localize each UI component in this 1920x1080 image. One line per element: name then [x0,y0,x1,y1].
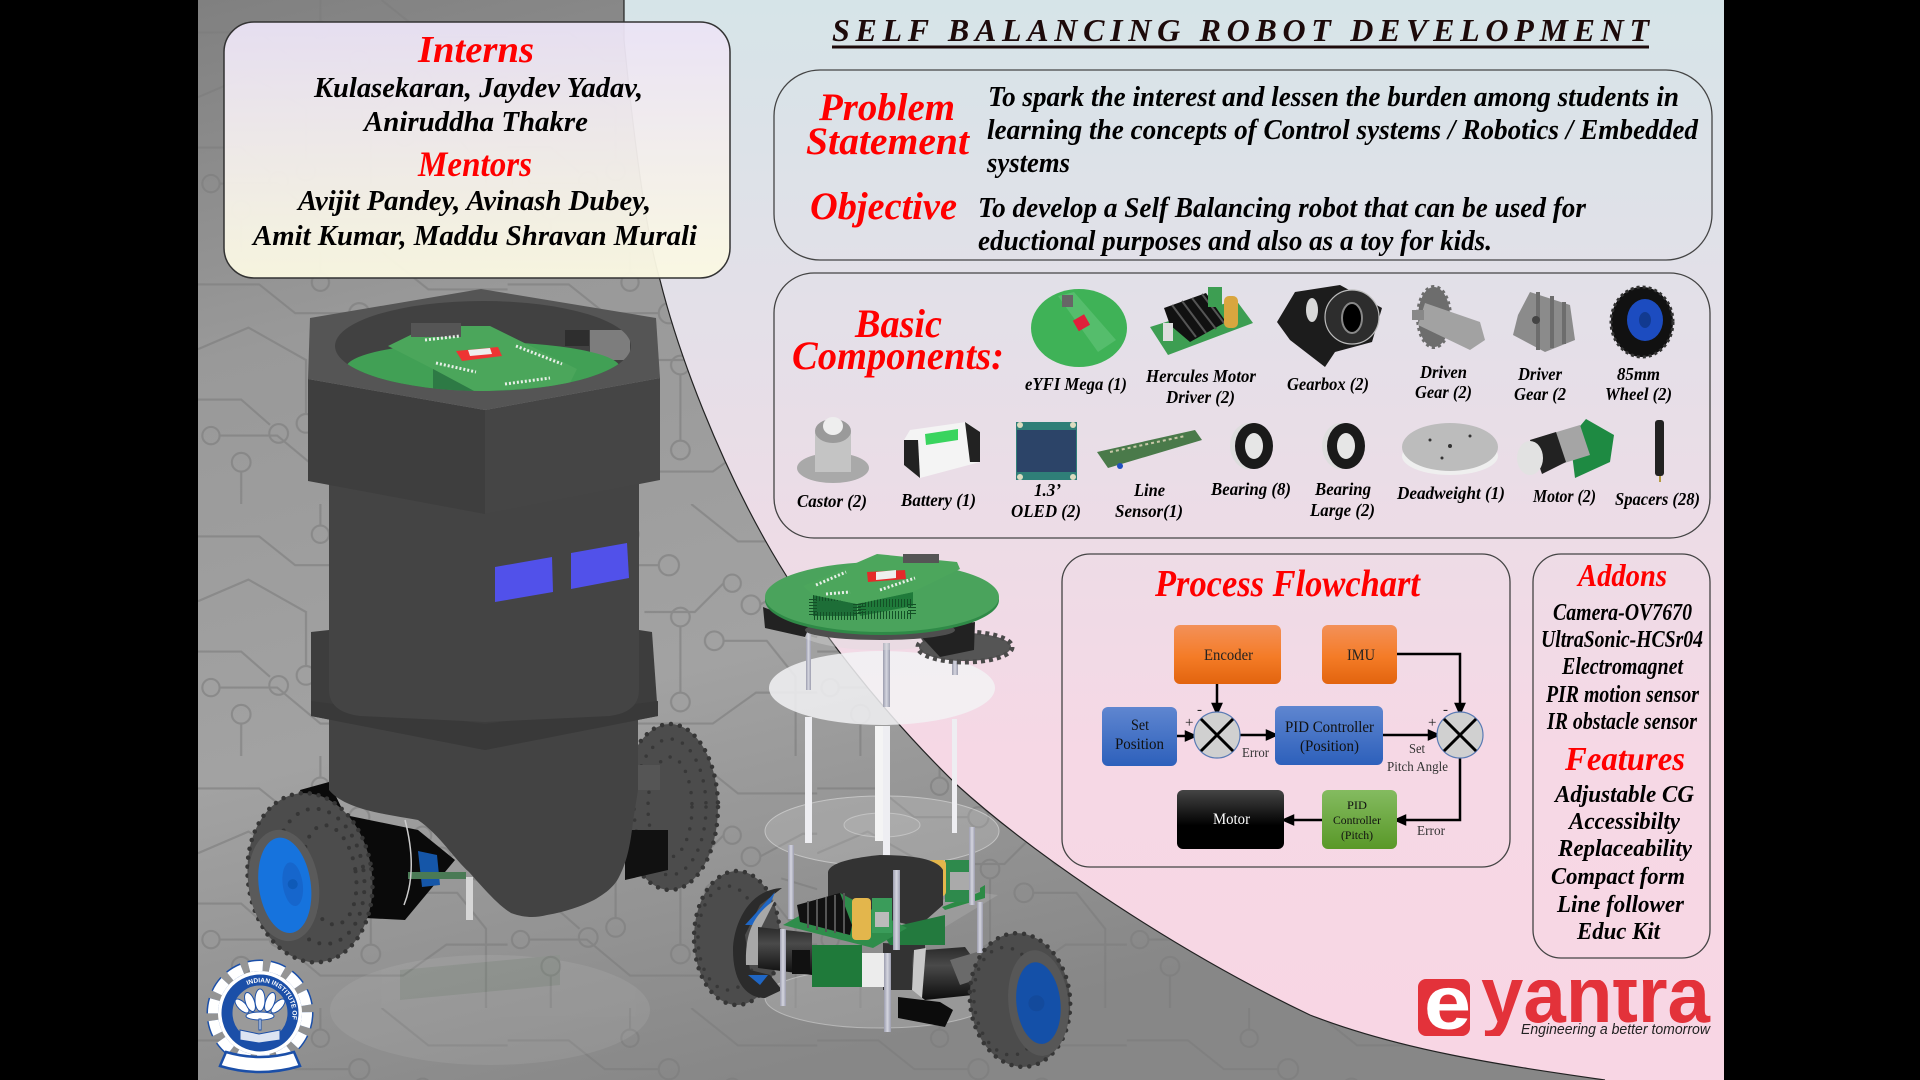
component: castor: Castor (2) [797,491,867,512]
right wheel [963,928,1077,1072]
heading: interns: Interns [417,29,534,71]
block: encoder: Encoder [1204,647,1254,664]
block: IMU: IMU [1347,647,1375,664]
block: PID controller position [1275,706,1383,765]
component: OLED: OLED (2) [1011,501,1081,522]
block: encoder [1174,625,1281,684]
upper steel rods [806,630,958,707]
objective text: eductional purposes and also as a toy for kids. [978,226,1492,257]
heading: addons: Addons [1576,557,1667,593]
heading: problem statement: Statement [806,120,970,163]
logo e badge: e [1424,961,1471,1046]
flow labels: Error [1242,746,1269,761]
component: bearing [1210,423,1291,500]
addons list: IR obstacle sensor [1546,709,1698,735]
black axle assembly [300,782,473,920]
flow labels: Pitch Angle [1387,760,1448,775]
objective text [978,193,1587,257]
heading: objective: Objective [810,185,957,228]
rear motor driver [928,860,985,910]
block: PID controller position: PID Controller [1285,719,1375,736]
component: bearing large [1309,423,1375,521]
motto ribbon [220,1052,300,1072]
illustration: exploded robot [694,554,1077,1072]
lotus emblem [233,989,287,1043]
logo wordmark: yantra [1481,950,1710,1039]
component: gearbox [1277,285,1382,395]
block: set position [1102,707,1177,766]
green bracket and white block [812,915,945,987]
component: motor [1517,419,1614,507]
pastel curved right panel [624,0,1724,1080]
component: eYFI Mega [1025,289,1127,395]
component: spacers [1615,420,1700,510]
block: PID controller pitch: Controller [1333,813,1381,827]
flow labels [1185,702,1448,839]
panel: interns and mentors [224,22,730,278]
summing junction left [1194,712,1240,758]
rear axle [625,765,668,880]
component: deadweight [1396,423,1505,504]
lower collar [311,630,658,750]
logo tagline: Engineering a better tomorrow [1521,1021,1711,1038]
logo: IIT Bombay [206,960,314,1074]
block: motor: Motor [1213,811,1251,828]
component: 85mm wheel: 85mm [1617,364,1660,384]
blue display left [495,557,553,602]
features list: Accessibilty [1567,809,1680,835]
frosted white disc [769,651,995,725]
flow labels: Set [1409,742,1425,757]
block: PID controller pitch: (Pitch) [1341,828,1373,842]
features list: Adjustable CG [1553,782,1695,808]
component: bearing large: Large (2) [1309,500,1375,521]
gear and gearbox under top disc [763,606,1012,662]
lower transparent discs [765,796,999,1028]
component: driven gear: Gear (2) [1415,382,1472,403]
component: battery [900,422,980,511]
intern names: Kulasekaran, Jaydev Yadav, [313,72,643,104]
block: set position: Set [1131,717,1149,734]
panel: process flowchart [1062,554,1510,867]
component: Hercules motor driver [1145,287,1257,408]
seal lettering: INDIAN INSTITUTE OF TECHNOLOGY BOMBAY [246,978,297,1020]
illustration: enclosed robot [237,289,718,1065]
block: motor [1177,790,1284,849]
features list: Compact form [1551,864,1685,890]
main cylinder body [329,470,639,722]
component: line sensor: Sensor(1) [1115,501,1183,522]
objective text: To develop a Self Balancing robot that can be used for [978,193,1587,224]
mentor names: Amit Kumar, Maddu Shravan Murali [251,220,697,252]
features list: Educ Kit [1576,919,1661,945]
flow labels: + [1185,715,1193,731]
intern names: Aniruddha Thakre [362,106,588,138]
grey circuit background [198,0,1724,1080]
component: castor [797,417,869,512]
central battery box [828,855,943,927]
component: battery: Battery (1) [900,490,976,511]
block: PID controller position: (Position) [1300,738,1359,755]
block: PID controller pitch [1322,790,1397,849]
features list [1551,782,1695,945]
lower body [329,716,638,917]
rear wheel [622,724,718,890]
block: IMU [1322,625,1397,684]
block: PID controller pitch: PID [1347,798,1367,812]
component: bearing large: Bearing [1314,479,1371,499]
flow labels: Error [1417,824,1445,839]
problem statement text: learning the concepts of Control systems / Robotics / Embedded [987,115,1699,146]
addons list: PIR motion sensor [1545,682,1700,708]
heading: basic components [792,301,1004,378]
heading: mentors: Mentors [417,144,532,184]
panel: addons and features [1533,554,1710,958]
title: SELF BALANCING ROBOT DEVELOPMENT [832,12,1650,48]
logo: e-yantra [1418,979,1711,1037]
flow labels: + [1428,715,1436,731]
problem statement text [986,82,1699,179]
heading: basic components: Basic [854,301,942,346]
heading: problem statement [806,86,970,163]
component: spacers: Spacers (28) [1615,489,1700,510]
component: driven gear [1412,287,1485,403]
component: Hercules motor driver: Hercules Motor [1145,366,1257,386]
black motors [758,927,990,1027]
component: gearbox: Gearbox (2) [1287,374,1369,395]
heading: features: Features [1564,741,1685,778]
gear outline [213,966,307,1060]
mentor names: Avijit Pandey, Avinash Dubey, [296,185,651,217]
component: driver gear [1513,292,1575,405]
component: bearing: Bearing (8) [1210,479,1291,500]
features list: Replaceability [1557,836,1692,862]
front wheel [237,785,383,971]
flow labels: - [1443,702,1448,718]
block: set position: Position [1115,736,1164,753]
summing junction right [1437,712,1483,758]
flow labels: - [1197,702,1202,718]
problem statement text: systems [986,148,1070,179]
top green disc with board [765,554,999,635]
ghost chassis shadow [330,955,650,1065]
addons list: Electromagnet [1561,654,1684,680]
addons list [1541,600,1703,735]
long white rods [805,717,957,867]
component: 85mm wheel [1605,287,1673,405]
component: driver gear: Gear (2 [1514,384,1566,405]
component: line sensor: Line [1133,480,1165,500]
component: motor: Motor (2) [1532,486,1596,507]
intern names [313,72,643,138]
problem statement text: To spark the interest and lessen the burden among students in [988,82,1679,113]
panel: problem statement and objective [774,70,1712,260]
arrows [1177,654,1464,824]
component: deadweight: Deadweight (1) [1396,483,1505,504]
component: Hercules motor driver: Driver (2) [1165,387,1235,408]
addons list: Camera-OV7670 [1553,600,1692,626]
blue display right [571,543,629,589]
collar opening with circuit board [335,301,631,394]
blue seal ring [227,980,293,1046]
component: line sensor [1097,430,1202,522]
heading: basic components: Components: [792,333,1004,378]
component: driver gear: Driver [1517,364,1563,384]
panel: basic components [774,273,1710,538]
component: driven gear: Driven [1419,362,1467,382]
features list: Line follower [1556,892,1685,918]
component: OLED: 1.3’ [1034,480,1061,500]
component: eYFI Mega: eYFI Mega (1) [1025,374,1127,395]
heading: problem statement: Problem [818,86,955,129]
poster canvas [198,0,1724,1080]
heading: process flowchart: Process Flowchart [1154,563,1421,605]
upper collar [308,289,660,514]
component: OLED [1011,422,1081,522]
motor driver board [783,893,907,948]
spacers [780,827,983,1032]
mentor names [251,185,697,252]
left wheel [694,871,782,1005]
component: 85mm wheel: Wheel (2) [1605,384,1672,405]
addons list: UltraSonic-HCSr04 [1541,627,1703,653]
